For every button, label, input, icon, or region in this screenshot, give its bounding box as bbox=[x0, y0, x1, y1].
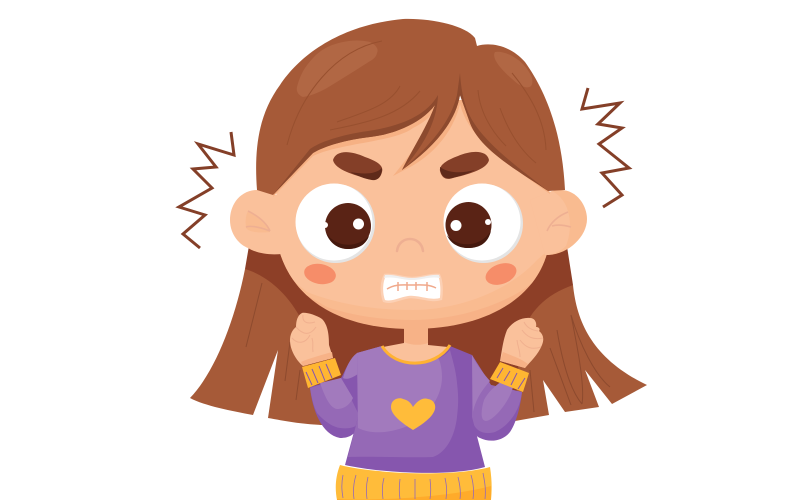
right eye bbox=[444, 184, 523, 263]
right fist bbox=[500, 318, 543, 368]
left ear bbox=[230, 190, 290, 254]
left cuff bbox=[302, 358, 341, 388]
right sleeve bbox=[472, 355, 522, 441]
left fist bbox=[290, 313, 333, 366]
right hair lock bbox=[515, 285, 647, 421]
hair fringe shadow on forehead bbox=[273, 100, 550, 197]
nose bbox=[397, 239, 423, 251]
sweater body bbox=[345, 345, 485, 473]
left hair lock bbox=[190, 269, 322, 425]
icon: left anger zigzag bbox=[179, 132, 234, 248]
fringe dark bands bbox=[273, 95, 438, 195]
collar bbox=[382, 345, 450, 363]
mouth bbox=[382, 275, 442, 302]
right eyebrow bbox=[440, 152, 489, 179]
left sleeve bbox=[310, 353, 358, 438]
back hair dark bbox=[245, 240, 573, 425]
right cheek bbox=[483, 259, 519, 289]
sleeves bbox=[310, 353, 522, 441]
right cuff bbox=[490, 362, 529, 392]
hair highlights bbox=[297, 40, 532, 97]
top hair bbox=[256, 19, 565, 195]
right ear bbox=[530, 190, 587, 255]
left eyebrow bbox=[333, 152, 382, 180]
skirt bbox=[336, 465, 492, 500]
face bbox=[276, 104, 548, 329]
neck bbox=[383, 325, 448, 363]
illustration: angry girl bbox=[175, 18, 647, 500]
icon: right anger zigzag bbox=[582, 88, 629, 207]
left eye bbox=[296, 184, 375, 263]
left cheek bbox=[303, 261, 337, 287]
heart bbox=[391, 398, 435, 430]
